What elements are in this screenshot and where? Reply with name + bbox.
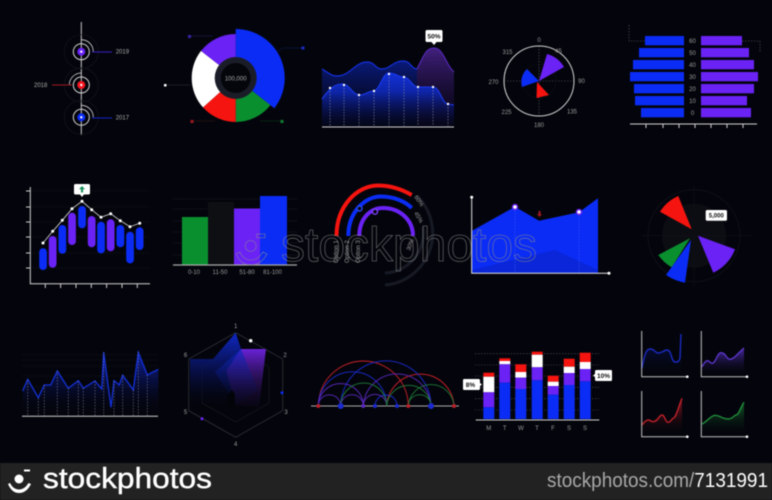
panel: blue area chart with axes (470, 196, 610, 275)
panel: mini line chart blue (642, 331, 689, 378)
segment: purple (201, 34, 236, 78)
wedge: blue (666, 240, 691, 283)
age labels: 10 (689, 99, 696, 105)
radar axis labels: 4 (234, 442, 238, 448)
blue arcs (318, 361, 431, 406)
polar axis labels: 135 (567, 110, 578, 116)
segment: red (203, 78, 236, 122)
range labels: 81-100 (263, 270, 283, 276)
data points and drop lines (329, 73, 449, 126)
arc labels: 60% (412, 195, 425, 209)
age labels: 50 (689, 51, 696, 57)
arc labels: 30% (406, 238, 416, 252)
wedge: blue (521, 69, 539, 87)
age labels: 40 (689, 63, 696, 69)
weekday labels: F (551, 426, 555, 432)
bar 0-10 (182, 217, 208, 265)
polar axis labels: 180 (534, 123, 545, 129)
footer bar (0, 463, 772, 500)
callout: green up arrow (74, 184, 90, 197)
donut centre value: 100,000 (225, 76, 247, 82)
candles (39, 206, 144, 270)
stack S (564, 359, 575, 419)
panel: mini line chart red (642, 391, 689, 438)
radar markers (200, 339, 284, 420)
range labels: 11-50 (213, 270, 228, 276)
polar axis labels: 45 (555, 49, 562, 55)
polar axis labels: 270 (488, 80, 499, 86)
age labels (689, 39, 696, 117)
panel: candlestick chart (26, 184, 150, 288)
radar axis labels: 2 (283, 353, 287, 359)
footer logo icon (8, 470, 31, 493)
panel: mini line chart green (701, 391, 748, 438)
radar axis labels: 5 (184, 410, 188, 416)
arc labels (334, 195, 425, 263)
purple series (226, 349, 266, 407)
callout: 10%: 10% (597, 373, 610, 380)
wedge: green (658, 238, 690, 267)
arc labels: Option 2 (345, 240, 351, 263)
upper curve (322, 61, 417, 76)
age labels: 20 (689, 87, 696, 93)
arc labels: Option 1 (334, 240, 340, 263)
panel: radial pie with 5,000 callout (642, 186, 752, 286)
right purple bars (701, 36, 758, 117)
axes (470, 196, 610, 275)
weekday labels: M (486, 426, 491, 432)
range labels: 0-10 (188, 270, 201, 276)
pyramid axis (630, 124, 757, 128)
left blue bars (630, 36, 684, 117)
red arcs (318, 361, 454, 406)
purple arcs (318, 374, 431, 406)
wedge: red (660, 196, 692, 229)
footer brand name: stockphotos (43, 463, 212, 495)
polar axis labels: 225 (501, 110, 512, 116)
weekday labels: S (583, 426, 587, 432)
polar axis labels: 315 (502, 50, 513, 56)
blue series (190, 333, 241, 405)
axes (26, 187, 150, 288)
stack T (499, 358, 510, 419)
range labels: 51-80 (239, 270, 255, 276)
stack W (515, 364, 526, 419)
panel: stacked bar chart (463, 352, 612, 432)
stack M (483, 373, 494, 419)
weekday labels: W (518, 426, 524, 432)
arc labels: 45% (412, 211, 424, 225)
inner blue series (215, 349, 258, 405)
panel: timeline 2017-2019 (34, 22, 130, 135)
watermark logo (236, 234, 267, 265)
age labels: 0 (691, 111, 695, 117)
timeline node 2018: 2018 (34, 83, 48, 89)
panel: polar chart (488, 38, 585, 129)
timeline node 2017: 2017 (116, 115, 130, 121)
radar axis labels: 1 (234, 324, 238, 330)
wedge: purple (698, 236, 735, 273)
trend line with dots (42, 200, 141, 244)
panel: radar chart (184, 324, 288, 448)
panel: radial progress arcs (334, 186, 433, 285)
weekday labels: S (567, 426, 571, 432)
icon: red down arrow (537, 211, 542, 217)
arc labels: Option 3 (356, 240, 362, 263)
line (23, 352, 158, 407)
nodes (316, 403, 456, 409)
arc: purple 30% (359, 208, 413, 236)
bar 51-80 (234, 208, 260, 265)
radar axis labels (184, 324, 288, 448)
segment: white (192, 51, 236, 107)
bar 11-50 (208, 202, 234, 265)
panel: mini line chart purple (701, 331, 748, 378)
stack F (548, 376, 559, 419)
bar 81-100 (260, 196, 287, 265)
polar axis labels: 90 (578, 79, 585, 85)
panel: area chart with 50% callout (322, 30, 454, 127)
callout: 50%: 50% (427, 34, 441, 40)
wedge: red (536, 82, 549, 98)
panel: arc diagram (311, 361, 459, 409)
watermark text: stockphotos (281, 219, 537, 272)
radar axis labels: 3 (284, 410, 288, 416)
weekday labels (486, 426, 587, 432)
green arcs (341, 383, 454, 406)
wedge: purple (539, 54, 564, 81)
polar axis labels: 0 (537, 38, 541, 44)
stack S2 (580, 353, 591, 419)
radar axis labels: 6 (184, 353, 188, 359)
age labels: 30 (689, 75, 696, 81)
centre shadow (227, 390, 235, 408)
age labels: 60 (689, 39, 696, 45)
callout: 10% (593, 370, 612, 381)
arc: red 60% (336, 186, 412, 236)
lower curve (322, 73, 454, 105)
callout: 5,000: 5,000 (709, 214, 724, 220)
range labels (188, 270, 283, 276)
timeline node 2019: 2019 (116, 50, 130, 56)
markers (512, 204, 582, 214)
panel: spiky line chart (22, 352, 158, 416)
callout: 8% (463, 379, 482, 390)
polar axis labels (488, 38, 585, 129)
panel: donut chart (164, 29, 304, 123)
weekday labels: T (503, 426, 507, 432)
panel: bar chart by range (173, 196, 297, 276)
panel: population pyramid bars (629, 25, 760, 128)
weekday labels: T (535, 426, 539, 432)
callout: 8%: 8% (466, 382, 475, 389)
stack T2 (532, 352, 543, 419)
arc: blue 45% (348, 196, 412, 236)
segment: blue (236, 29, 285, 108)
purple peak curve (417, 48, 454, 72)
area under line (23, 352, 158, 416)
drop lines (28, 352, 147, 416)
segment: green (236, 78, 270, 122)
footer image url: stockphotos.com/7131991 (547, 470, 768, 492)
